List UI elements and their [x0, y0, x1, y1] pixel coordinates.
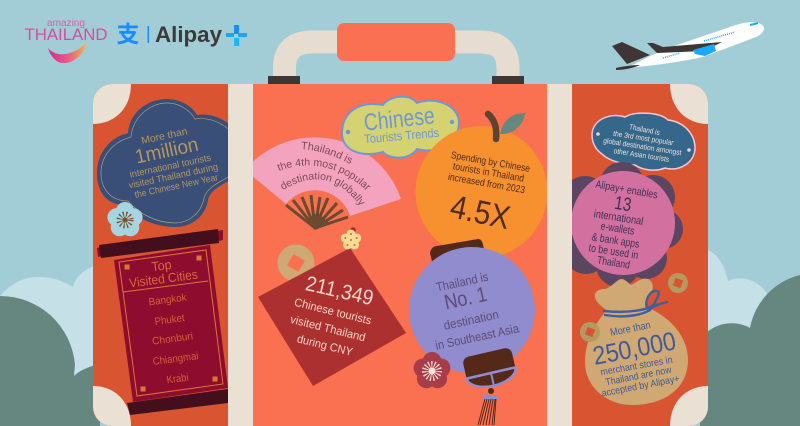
- panel: top visited cities scroll: Visited Cities: [128, 267, 199, 290]
- panel: orange spending 4.5X: Spending by Chinese: [450, 150, 531, 175]
- icon: red blossom: [414, 352, 450, 388]
- panel: lantern No. 1: destination: [442, 307, 500, 333]
- heading: Chinese Tourists Trends: [342, 97, 459, 158]
- panel: diamond 211,349: Chinese tourists: [293, 297, 373, 328]
- panel: left cloud 1 million: visited Thailand during: [128, 162, 219, 191]
- logo: Alipay: 支: [116, 21, 140, 47]
- logo: Amazing Thailand: amazing: [47, 18, 85, 29]
- icon: airplane: [612, 22, 764, 70]
- panel: left cloud 1 million: international tourists: [129, 152, 212, 181]
- suitcase body: [93, 84, 708, 426]
- panel: diamond 211,349: visited Thailand: [289, 314, 367, 344]
- panel: lantern No. 1: No. 1: [442, 283, 489, 314]
- panel: lantern No. 1: Thailand is: [435, 270, 490, 294]
- panel: blue cloud 3rd most popular: [592, 113, 695, 170]
- panel: fan 4th most popular: [253, 137, 401, 230]
- panel: pink flower 13 e-wallets: & bank apps: [591, 231, 640, 251]
- suitcase handle: [268, 23, 524, 85]
- panel: money bag 250,000: More than: [609, 319, 652, 339]
- panel: left cloud 1 million: the Chinese New Year: [134, 172, 219, 201]
- logo: Alipay: [116, 21, 247, 47]
- icon: blue blossom: [107, 202, 143, 236]
- panel: lantern No. 1: [409, 239, 535, 425]
- panel: top visited cities scroll: Chonburi: [152, 330, 194, 348]
- panel: left cloud 1 million: 1million: [133, 134, 200, 169]
- panel: blue cloud 3rd most popular: other Asian tourists: [613, 146, 670, 164]
- panel: pink flower 13 e-wallets: 13: [613, 193, 633, 216]
- panel: diamond 211,349: during CNY: [296, 333, 354, 359]
- panel: diamond 211,349: 211,349: [303, 272, 376, 310]
- heading: Chinese Tourists Trends: Chinese: [362, 102, 436, 137]
- panel: top visited cities scroll: Top: [151, 257, 172, 274]
- panel: top visited cities scroll: Bangkok: [148, 292, 188, 308]
- panel: orange spending 4.5X: [416, 113, 548, 258]
- panel: top visited cities scroll: [97, 229, 228, 415]
- panel: fan 4th most popular: destination globally: [281, 172, 364, 205]
- panel: diamond 211,349: [258, 248, 406, 386]
- panel: blue cloud 3rd most popular: global destination amongst: [603, 136, 683, 157]
- clouds: left: [0, 264, 100, 426]
- icon: ornament knot: [341, 227, 361, 249]
- panel: left cloud 1 million: More than: [140, 126, 189, 147]
- panel: money bag 250,000: accepted by Alipay+: [601, 374, 681, 399]
- panel: top visited cities scroll: Phuket: [154, 312, 185, 328]
- suitcase corners: [93, 84, 708, 426]
- panel: pink flower 13 e-wallets: to be used in: [588, 242, 639, 262]
- panel: lantern No. 1: in Southeast Asia: [434, 321, 520, 353]
- panel: money bag 250,000: 250,000: [590, 325, 678, 371]
- panel: left cloud 1 million: [97, 99, 230, 227]
- panel: orange spending 4.5X: tourists in Thailand: [452, 161, 525, 185]
- icon: coin: [278, 244, 314, 282]
- clouds: right: [700, 247, 800, 426]
- panel: top visited cities scroll: Chiangmai: [152, 350, 199, 368]
- logo: Alipay: Alipay: [155, 22, 222, 47]
- panel: money bag 250,000: [580, 273, 688, 405]
- panel: blue cloud 3rd most popular: Thailand is: [628, 122, 661, 137]
- panel: blue cloud 3rd most popular: the 3rd most popular: [613, 129, 675, 147]
- panel: pink flower 13 e-wallets: international: [593, 208, 644, 228]
- panel: orange spending 4.5X: increased from 2023: [447, 172, 526, 196]
- panel: pink flower 13 e-wallets: e-wallets: [600, 220, 636, 238]
- logo: Amazing Thailand: THAILAND: [24, 26, 108, 44]
- heading: Chinese Tourists Trends: Tourists Trends: [364, 126, 440, 146]
- panel: pink flower 13 e-wallets: [563, 162, 683, 287]
- suitcase straps: [228, 84, 572, 426]
- panel: fan 4th most popular: Thailand is: [302, 142, 352, 164]
- panel: money bag 250,000: merchant stores in: [600, 355, 673, 378]
- panel: orange spending 4.5X: 4.5X: [447, 187, 514, 236]
- logo: Amazing Thailand: [24, 18, 108, 63]
- panel: money bag 250,000: Thailand are now: [605, 365, 673, 388]
- panel: pink flower 13 e-wallets: Alipay+ enables: [594, 179, 659, 201]
- panel: top visited cities scroll: Krabi: [166, 372, 189, 386]
- panel: fan 4th most popular: the 4th most popular: [277, 158, 370, 190]
- panel: pink flower 13 e-wallets: Thailand: [596, 255, 631, 272]
